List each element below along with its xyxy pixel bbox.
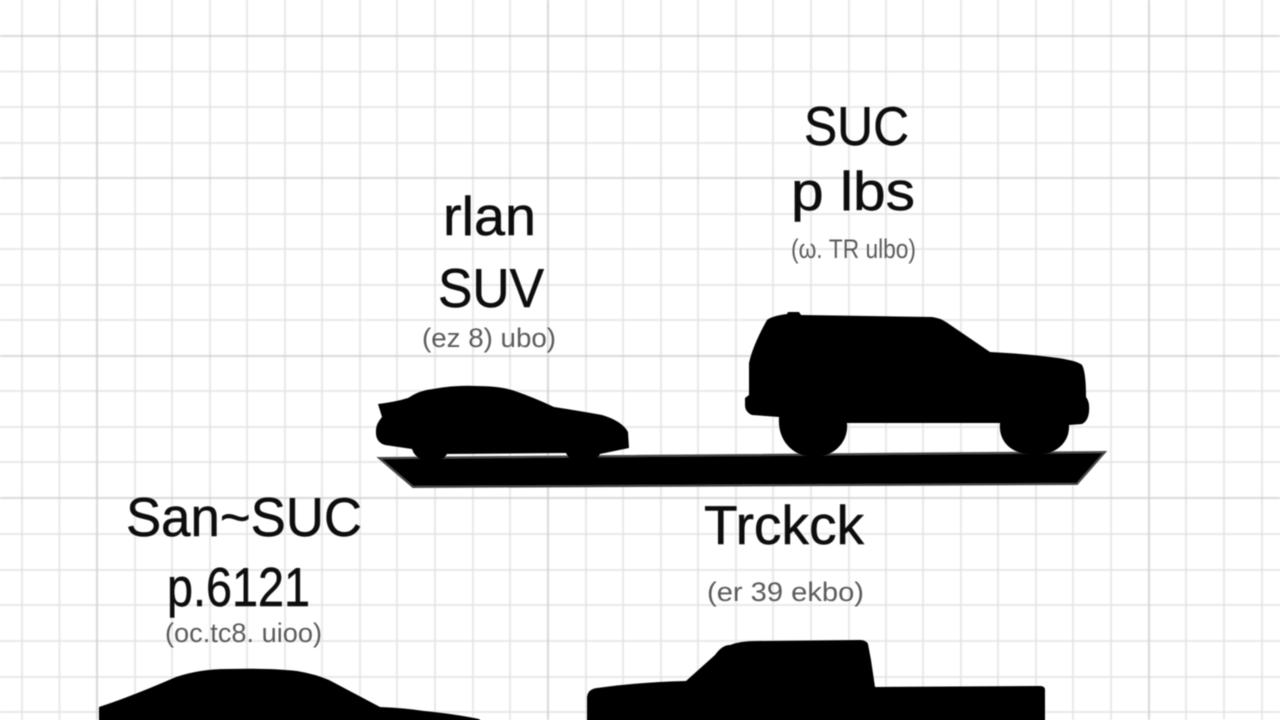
heading: SUC: SUC (804, 95, 909, 157)
sublabel: center: (ez 8) ubo) (422, 323, 556, 353)
platform: shelf under vehicles (379, 452, 1105, 487)
icon: bottom sedan silhouette (99, 669, 481, 720)
value: p.6121: p.6121 (167, 556, 310, 618)
value: p lbs: p lbs (791, 160, 915, 222)
heading: rlan: rlan (443, 185, 536, 247)
sublabel: bottom left: (oc.tc8. uioo) (165, 618, 322, 648)
icon: pickup truck silhouette (587, 640, 1045, 720)
heading: SUV: SUV (438, 257, 544, 319)
icon: sedan silhouette (376, 386, 629, 460)
heading: Trckck: Trckck (704, 494, 864, 556)
sublabel: top right: (ω. TR ulbo) (791, 234, 916, 264)
label group: bottom left (126, 486, 362, 648)
heading: San~SUC: San~SUC (126, 486, 362, 548)
icon: SUV silhouette (745, 312, 1089, 457)
label group: top right SUV (791, 95, 916, 264)
label group: bottom right truck (704, 494, 864, 607)
label group: center sedan (422, 185, 556, 353)
sublabel: truck: (er 39 ekbo) (707, 577, 864, 607)
